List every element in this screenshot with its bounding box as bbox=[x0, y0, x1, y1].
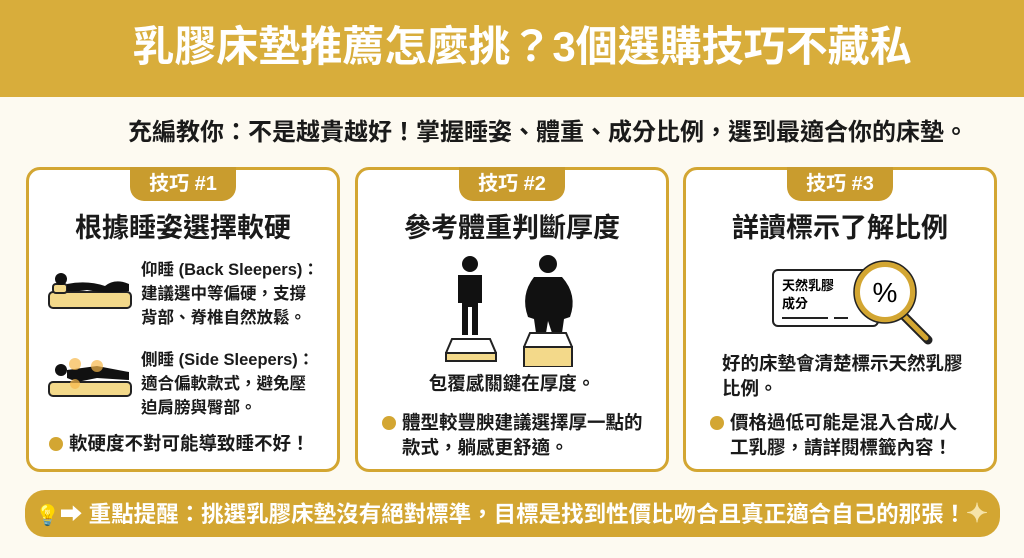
text: back sleepers: 建議選中等偏硬，支撐 bbox=[141, 285, 306, 303]
header band bbox=[0, 0, 1024, 97]
subtitle: 充編教你：不是越貴越好！掌握睡姿、體重、成分比例，選到最適合你的床墊。 bbox=[128, 119, 968, 146]
icon: label with magnifier: 成分 bbox=[782, 296, 808, 311]
bullet 2: 款式，躺感更舒適。 bbox=[402, 437, 569, 458]
bottom callout bbox=[25, 490, 1000, 537]
icon: label with magnifier: 天然乳膠 bbox=[782, 278, 834, 293]
title: 乳膠床墊推薦怎麼挑？3個選購技巧不藏私 bbox=[132, 23, 912, 70]
tab 1 bbox=[130, 167, 236, 201]
panel: tip 2 bbox=[355, 167, 669, 472]
icon: body weights and mattresses bbox=[445, 255, 573, 367]
icon: label with magnifier: % bbox=[873, 277, 897, 308]
text: back sleepers: 仰睡 (Back Sleepers)： bbox=[141, 261, 319, 279]
heading 3: 詳讀標示了解比例 bbox=[732, 213, 948, 243]
panel: tip 3 bbox=[683, 167, 997, 472]
icon: back sleeper bbox=[48, 273, 132, 309]
tab 3 bbox=[787, 167, 893, 201]
heading 1: 根據睡姿選擇軟硬 bbox=[75, 213, 291, 243]
bottom callout: ➡ 重點提醒：挑選乳膠床墊沒有絕對標準，目標是找到性價比吻合且真正適合自己的那張！✦ bbox=[60, 498, 988, 528]
icon: side sleeper bbox=[48, 358, 132, 397]
tab 1: 技巧 #1 bbox=[149, 173, 217, 195]
text: side sleepers: 側睡 (Side Sleepers)： bbox=[141, 351, 314, 369]
tab 3: 技巧 #3 bbox=[806, 173, 874, 195]
text: side sleepers: 適合偏軟款式，避免壓 bbox=[141, 375, 306, 393]
tab 2 bbox=[459, 167, 565, 201]
icon: bulb: 💡 bbox=[35, 505, 60, 527]
tab 2: 技巧 #2 bbox=[478, 173, 546, 195]
text: side sleepers: 迫肩膀與臀部。 bbox=[141, 399, 256, 417]
heading 2: 參考體重判斷厚度 bbox=[404, 213, 620, 243]
icon: label with magnifier bbox=[772, 260, 932, 344]
bullet 2: 體型較豐腴建議選擇厚一點的 bbox=[402, 412, 643, 433]
text: back sleepers: 背部、脊椎自然放鬆。 bbox=[141, 309, 306, 327]
bullet 2 bbox=[382, 412, 643, 458]
text: back sleepers bbox=[141, 260, 319, 327]
text: label: 好的床墊會清楚標示天然乳膠 bbox=[722, 353, 963, 374]
text: label bbox=[722, 353, 963, 399]
bullet 3 bbox=[710, 412, 957, 458]
panel: tip 1 bbox=[26, 167, 340, 472]
text: label: 比例。 bbox=[722, 378, 778, 399]
bullet 3: 工乳膠，請詳閱標籤內容！ bbox=[730, 437, 952, 458]
bullet 3: 價格過低可能是混入合成/人 bbox=[730, 412, 957, 433]
text: thickness: 包覆感關鍵在厚度。 bbox=[429, 373, 595, 394]
text: side sleepers bbox=[141, 350, 314, 417]
bullet 1: 軟硬度不對可能導致睡不好！ bbox=[69, 433, 310, 454]
